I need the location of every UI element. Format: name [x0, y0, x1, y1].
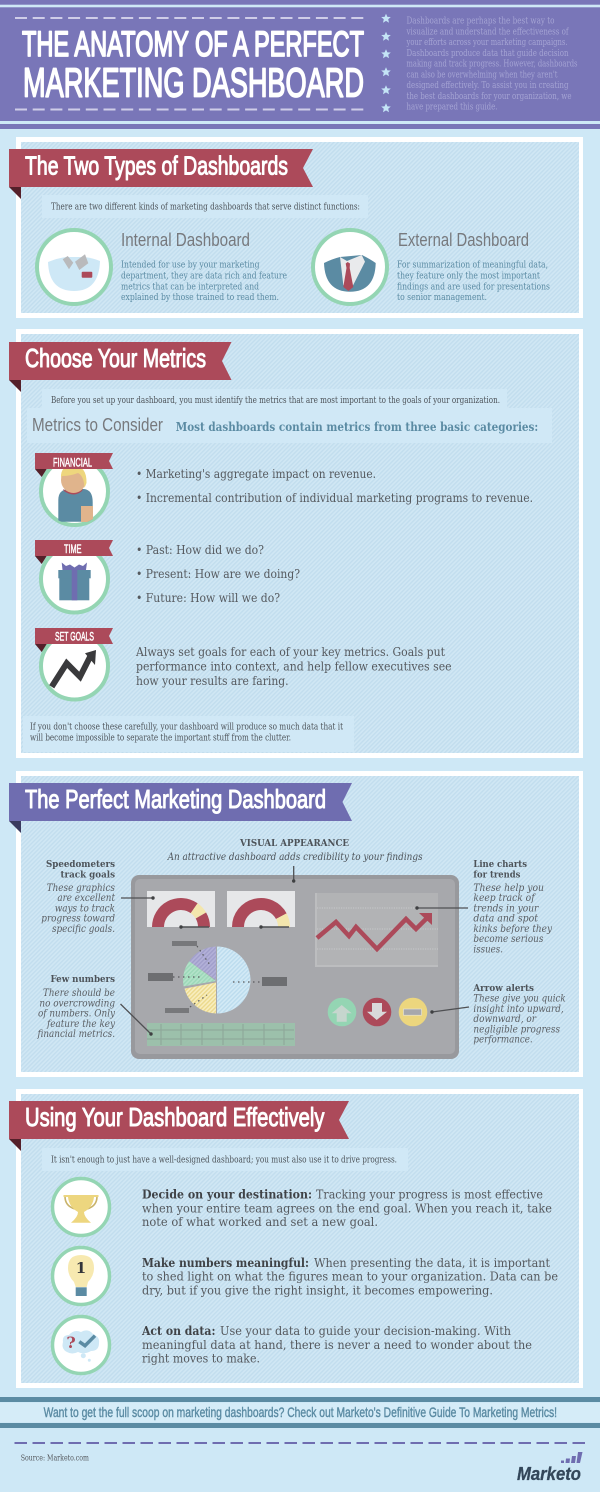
metrics to consider bar	[27, 408, 552, 443]
callout: line charts: These help you	[473, 883, 544, 894]
internal dashboard text: explained by those trained to read them.	[121, 293, 279, 303]
icon: person	[41, 458, 108, 525]
visual appearance caption: VISUAL APPEARANCE	[239, 838, 349, 849]
ribbon heading	[9, 783, 352, 833]
ribbon heading: The Perfect Marketing Dashboard	[25, 784, 326, 814]
marketo logo	[517, 1452, 582, 1484]
intro text: have prepared this guide.	[406, 102, 498, 112]
ribbon heading	[9, 149, 313, 199]
panel: using your dashboard effectively	[9, 1089, 583, 1388]
label ribbon: TIME	[64, 542, 82, 556]
callout: few numbers: There should be	[43, 988, 115, 999]
external dashboard text: findings and are used for presentations	[397, 282, 550, 292]
tip text: dry, but if you give the right insight, it becomes empowering.	[142, 1283, 493, 1297]
intro text: can also be overwhelming when they aren't	[406, 70, 558, 80]
bullets: • Future: How will we do?	[136, 591, 280, 605]
intro sentence	[42, 1148, 408, 1171]
ribbon heading: The Two Types of Dashboards	[25, 150, 288, 180]
callout: arrow alerts: downward, or	[473, 1014, 537, 1025]
label ribbon: FINANCIAL	[53, 456, 92, 470]
callout: line charts: for trends	[473, 870, 520, 880]
callout: few numbers: no overcrowding	[39, 998, 115, 1009]
icon: light bulb: 1	[76, 1259, 86, 1277]
bullets: • Incremental contribution of individual marketing programs to revenue.	[136, 491, 533, 505]
tip text: Tracking your progress is most effective	[316, 1188, 543, 1202]
callout: arrow alerts: negligible progress	[473, 1024, 560, 1035]
callout: arrow alerts	[472, 983, 566, 1045]
callout: few numbers	[37, 974, 115, 1040]
callout: speedometers: are excellent	[57, 893, 116, 904]
callout: line charts: Line charts	[473, 859, 527, 870]
arrow alert icons	[328, 998, 427, 1026]
label ribbon	[35, 453, 113, 477]
source note: Source: Marketo.com	[21, 1454, 89, 1462]
icon: light bulb	[52, 1248, 110, 1304]
callout: speedometers: These graphics	[47, 883, 115, 894]
callout: arrow alerts: performance.	[473, 1034, 533, 1045]
goals text	[135, 645, 452, 688]
bullets: • Past: How did we do?	[136, 543, 264, 557]
icon: rising arrow	[41, 632, 108, 700]
warning note	[23, 716, 354, 752]
callout: speedometers: progress toward	[41, 914, 115, 925]
intro sentence: It isn't enough to just have a well-designed dashboard; you must also use it to drive progress.	[51, 1156, 397, 1166]
callout: arrow alerts: Arrow alerts	[472, 983, 534, 994]
callout: line charts	[473, 859, 552, 955]
icon: shirt	[37, 230, 111, 304]
line chart	[315, 893, 438, 967]
tip: numbers	[52, 1248, 558, 1304]
tip text: when your entire team agrees on the end goal. When you reach it, take	[142, 1201, 552, 1215]
intro sentence: There are two different kinds of marketing dashboards that serve distinct functions:	[51, 202, 360, 212]
callout: speedometers: Speedometers	[46, 859, 115, 870]
callout: line charts: data and spot	[473, 914, 539, 925]
callout: speedometers: ways to track	[55, 903, 115, 914]
label ribbon: SET GOALS	[55, 630, 94, 644]
tip text: Act on data:	[141, 1324, 216, 1338]
header banner	[0, 0, 600, 129]
metrics to consider bar: Most dashboards contain metrics from three basic categories:	[176, 420, 538, 434]
intro sentence	[42, 389, 507, 409]
tip text: Use your data to guide your decision-making. With	[220, 1324, 511, 1338]
panel: choose your metrics	[9, 329, 583, 758]
ribbon heading: Using Your Dashboard Effectively	[25, 1102, 324, 1132]
callout: few numbers: of numbers. Only	[38, 1009, 115, 1020]
bullets	[136, 467, 533, 505]
callout: line charts: keep track of	[473, 893, 537, 904]
callout: line charts: issues.	[473, 944, 503, 955]
goals text: performance into context, and help fellow executives see	[136, 660, 452, 674]
ribbon heading	[9, 1101, 349, 1151]
intro text: Dashboards are perhaps the best way to	[406, 16, 554, 26]
tip: destination	[52, 1178, 552, 1236]
bullets	[136, 543, 300, 605]
goals text: Always set goals for each of your key metrics. Goals put	[135, 645, 445, 659]
warning note: If you don't choose these carefully, your dashboard will produce so much data that it	[30, 722, 343, 732]
callout: speedometers: track goals	[60, 870, 115, 880]
callout: arrow alerts: These give you quick	[473, 993, 566, 1004]
financial table	[147, 1023, 295, 1046]
set goals metric	[35, 628, 452, 700]
label ribbon	[35, 628, 113, 652]
ribbon heading	[9, 342, 232, 392]
intro sentence	[42, 195, 368, 218]
goals text: how your results are faring.	[136, 674, 289, 688]
label ribbon	[35, 540, 113, 564]
external dashboard text: For summarization of meaningful data,	[397, 260, 548, 270]
callout: arrow alerts: insight into upward,	[473, 1004, 564, 1015]
internal dashboard text: Intended for use by your marketing	[121, 260, 260, 270]
callout: few numbers: feature the key	[46, 1019, 115, 1030]
tip text	[141, 1324, 532, 1366]
title	[22, 25, 364, 106]
panel: the perfect marketing dashboard	[9, 771, 583, 1077]
visual appearance caption	[167, 838, 423, 863]
icon: gift box	[41, 546, 108, 612]
internal dashboard text: Internal Dashboard	[121, 230, 250, 250]
callout: speedometers: specific goals.	[52, 924, 115, 935]
call to action bar	[0, 1397, 600, 1428]
icon: thought bubble	[52, 1316, 110, 1374]
internal dashboard text: department, they are data rich and feature	[121, 272, 287, 282]
tip text: Decide on your destination:	[142, 1188, 312, 1202]
internal dashboard text: metrics that can be interpreted and	[121, 282, 259, 292]
ribbon heading: Choose Your Metrics	[25, 343, 206, 373]
tip text: to shed light on what the figures mean to your organization. Data can be	[142, 1270, 558, 1284]
intro text	[406, 16, 578, 112]
callout: line charts: become serious	[473, 934, 543, 945]
panel: two types of dashboards	[9, 137, 583, 318]
tip text: When presenting the data, it is important	[314, 1256, 550, 1270]
pie chart	[148, 941, 287, 1014]
external dashboard text	[397, 230, 550, 303]
tip text	[142, 1256, 558, 1297]
callout: few numbers: Few numbers	[50, 974, 115, 985]
financial metric	[35, 453, 533, 525]
title: THE ANATOMY OF A PERFECT	[22, 25, 364, 64]
bullets: • Marketing's aggregate impact on revenue.	[136, 467, 376, 481]
tip text: meaningful data at hand, there is never a need to wonder about the	[142, 1338, 532, 1352]
tip text	[142, 1188, 552, 1229]
tip text: right moves to make.	[142, 1352, 260, 1366]
internal dashboard text	[121, 230, 287, 303]
tip: act	[52, 1316, 532, 1374]
callout leader lines	[120, 866, 469, 1036]
marketo logo: Marketo	[517, 1464, 581, 1484]
callout: speedometers	[41, 859, 116, 935]
bullets: • Present: How are we doing?	[136, 567, 300, 581]
icon: thought bubble: ?	[66, 1333, 76, 1352]
tip text: Make numbers meaningful:	[142, 1256, 309, 1270]
external dashboard text: they feature only the most important	[397, 272, 540, 282]
callout: few numbers: financial metrics.	[37, 1029, 115, 1040]
callout: line charts: kinks before they	[473, 924, 552, 935]
speedometer gauges	[147, 891, 295, 927]
time metric	[35, 540, 300, 612]
tip text: note of what worked and set a new goal.	[142, 1215, 378, 1229]
external dashboard text: External Dashboard	[398, 230, 529, 250]
external dashboard text: to senior management.	[397, 293, 487, 303]
intro sentence: Before you set up your dashboard, you must identify the metrics that are most important to the goals of your organization.	[51, 396, 500, 406]
visual appearance caption: An attractive dashboard adds credibility to your findings	[167, 852, 423, 863]
metrics to consider bar: Metrics to Consider	[32, 415, 163, 435]
warning note: will become impossible to separate the important stuff from the clutter.	[30, 734, 291, 744]
icon: suit	[313, 230, 387, 304]
icon: trophy	[52, 1178, 110, 1236]
title: MARKETING DASHBOARD	[23, 60, 364, 106]
callout: line charts: trends in your	[473, 903, 540, 914]
stars column	[381, 14, 391, 112]
dashboard illustration	[131, 875, 459, 1059]
